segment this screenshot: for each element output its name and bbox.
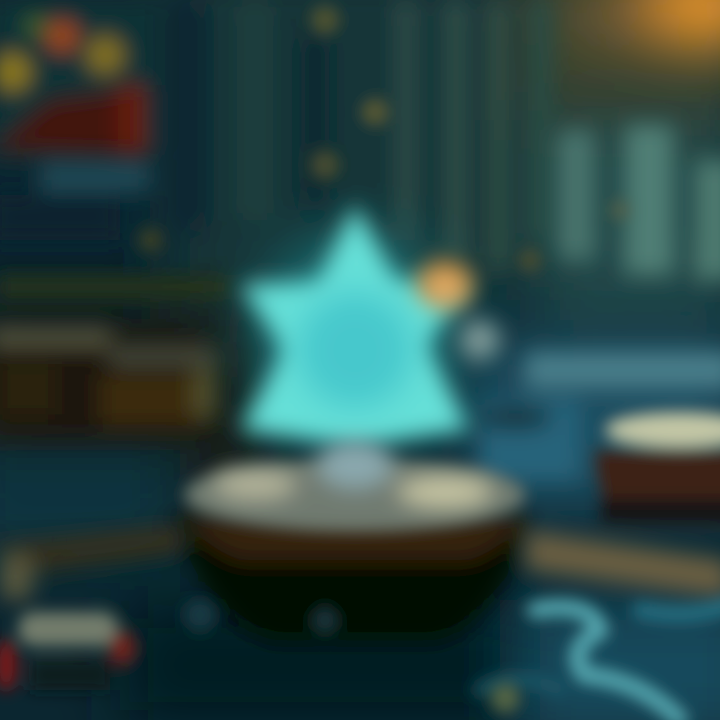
background: pale city towers on right xyxy=(558,125,720,310)
bowl shadow and body xyxy=(175,515,530,640)
chart: colourful top-left shapes xyxy=(0,0,160,240)
star outer glow xyxy=(255,240,455,440)
water: cyan ripples at bottom right xyxy=(480,605,720,720)
glow: orange flare beside star xyxy=(417,261,500,360)
bowl: central large bowl xyxy=(175,441,530,640)
star body xyxy=(240,205,470,445)
star centre xyxy=(297,292,413,408)
bowl: left brown bowl xyxy=(0,328,220,435)
background: warm bokeh dots xyxy=(0,6,629,299)
star: glowing cyan six-pointed star xyxy=(240,205,470,445)
bowl rim xyxy=(185,459,525,531)
glow: top right orange light xyxy=(560,0,720,51)
water: blue surface on right xyxy=(477,352,720,480)
bowl contents xyxy=(213,441,493,508)
table: wooden plank across xyxy=(0,525,720,600)
bowl: right brown bowl with pale rim xyxy=(595,413,720,525)
background: vertical stripes xyxy=(165,0,552,270)
decoration: red and white objects bottom left xyxy=(0,599,519,712)
